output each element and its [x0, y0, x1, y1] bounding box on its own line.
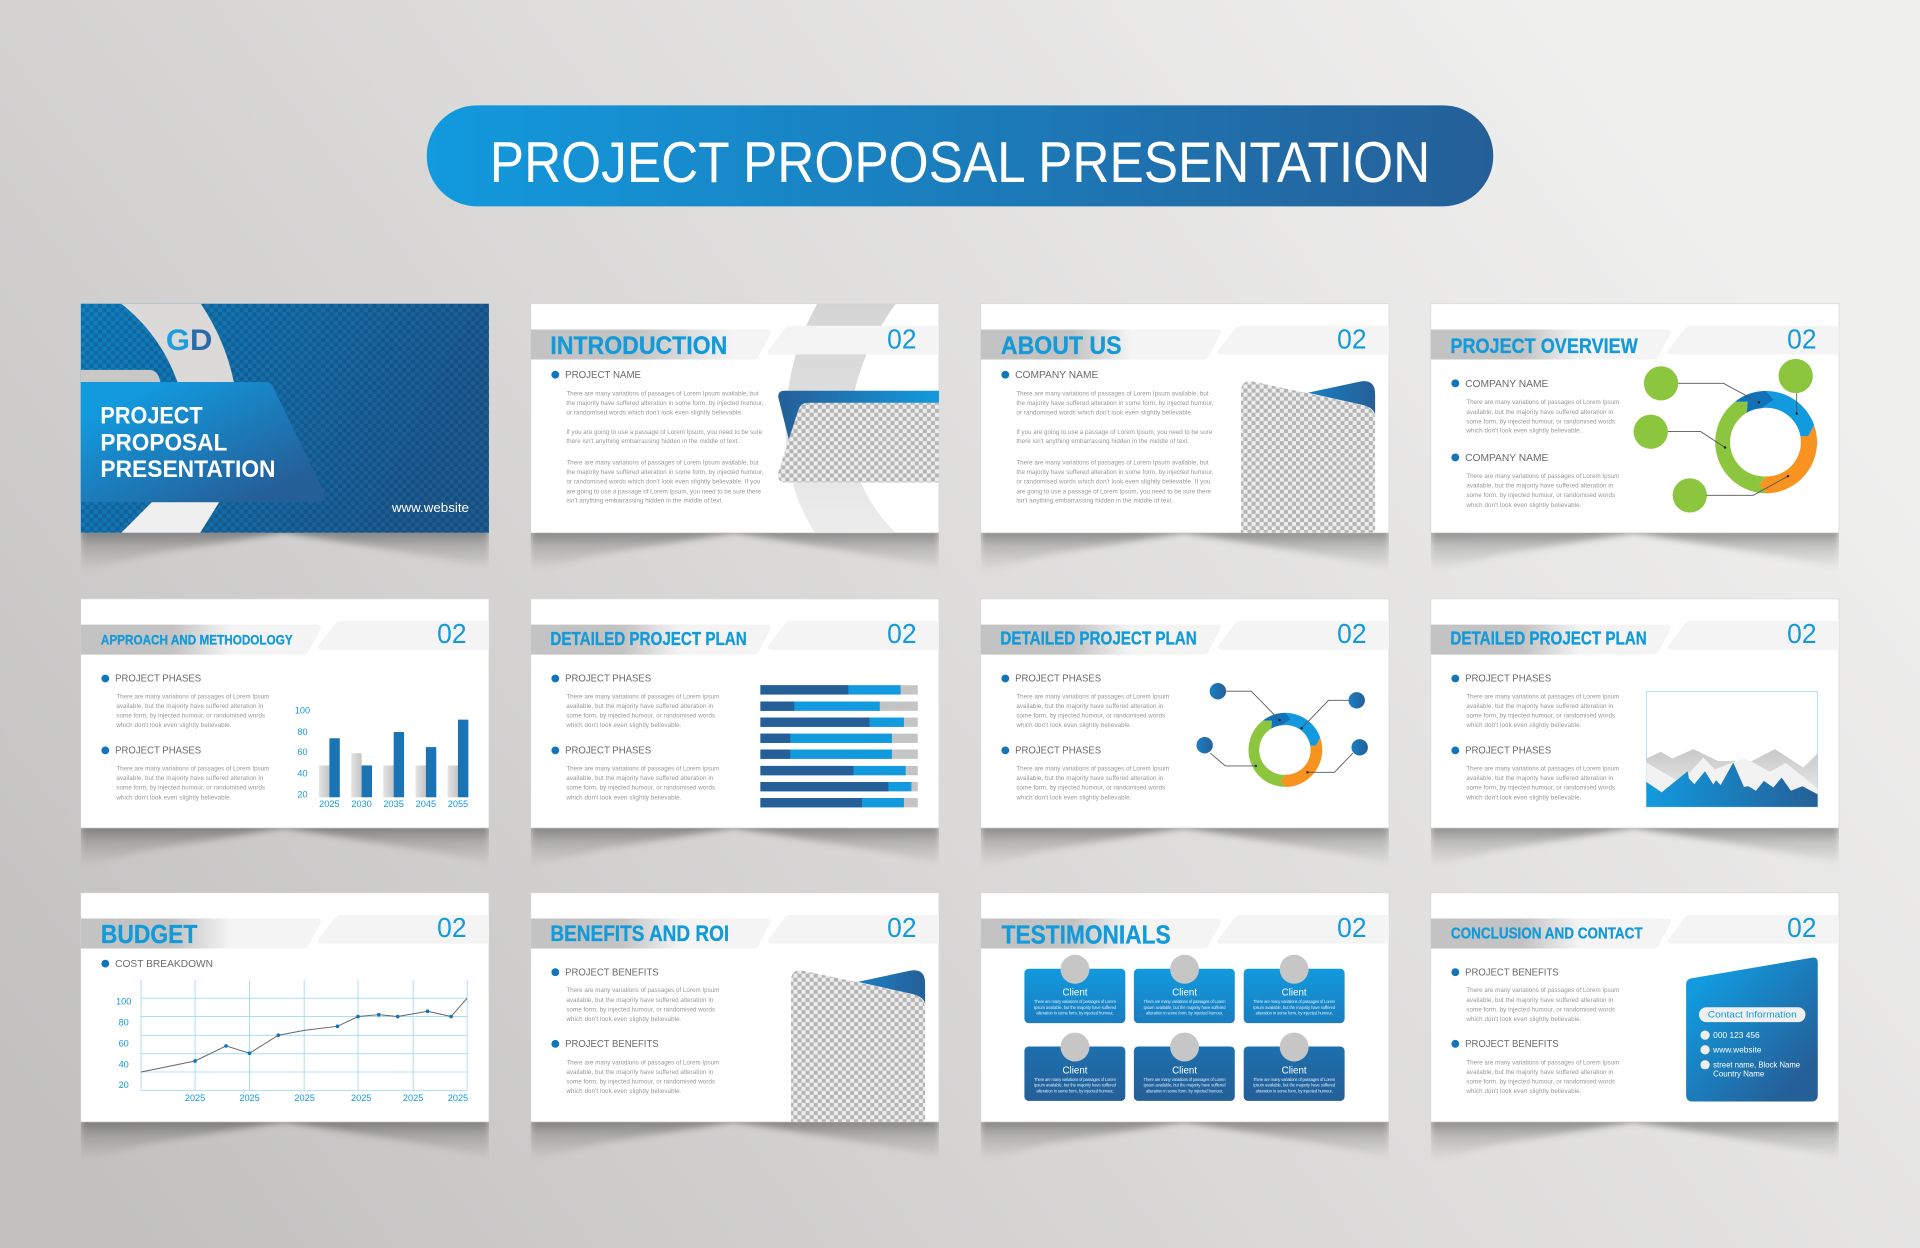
client card 3	[1244, 955, 1345, 1023]
text block: PROJECT PHASES	[115, 674, 201, 685]
text block: some form, by injected humour, or randomised words	[1466, 784, 1615, 791]
text block: There are many variations of passages of Lorem Ipsum available, but	[566, 459, 759, 466]
text block: PROJECT PHASES	[1465, 746, 1551, 757]
slide: testimonials	[981, 893, 1389, 1161]
text block	[101, 674, 269, 801]
text block: If you are going to use a passage of Lorem Ipsum, you need to be sure	[566, 429, 763, 436]
text block: which don't look even slightly believable.	[1465, 428, 1582, 435]
bar chart: 2045	[416, 799, 436, 809]
image placeholder	[791, 970, 925, 1122]
text block: There are many variations of passages of Lorem Ipsum	[1466, 987, 1619, 994]
section label: COST BREAKDOWN	[115, 959, 213, 970]
text block: the majority have suffered alteration in some form, by injected humour,	[1016, 469, 1214, 476]
client card 6: Client	[1282, 1065, 1307, 1076]
text block: or randomised words which don't look even slightly believable.	[1016, 410, 1193, 417]
text block: some form, by injected humour, or randomised words	[1466, 419, 1615, 426]
text block: which don't look even slightly believable.	[1015, 722, 1132, 729]
line chart: 100	[116, 997, 131, 1007]
text block: some form, by injected humour, or randomised words	[566, 784, 715, 791]
line chart: 40	[119, 1059, 129, 1069]
line chart: 2025	[448, 1093, 468, 1103]
client card 3: alteration in some form, by injected humour,	[1256, 1011, 1333, 1016]
slide: approach and methodology: 02	[437, 618, 467, 649]
title pill	[427, 105, 1493, 206]
bar chart: 60	[297, 747, 308, 757]
text block	[551, 674, 719, 801]
text block: some form, by injected humour, or randomised words	[1466, 492, 1615, 499]
cover title: PRESENTATION	[100, 456, 276, 483]
slide: budget	[81, 893, 489, 1161]
client card 5: Ipsum available, but the majority have suffered	[1144, 1083, 1226, 1088]
text block: There are many variations of passages of Lorem Ipsum	[1466, 399, 1619, 406]
text block: There are many variations of passages of Lorem Ipsum	[566, 1059, 719, 1066]
donut chart	[1634, 359, 1817, 513]
text block: available, but the majority have suffered alteration in	[1466, 775, 1614, 782]
contact card: street name, Block Name	[1713, 1059, 1800, 1069]
client card 4: There are many variations of passages of Lorem	[1034, 1077, 1117, 1082]
heading: BENEFITS AND ROI	[550, 921, 729, 946]
text block: PROJECT BENEFITS	[565, 967, 659, 978]
slide: conclusion and contact	[1431, 893, 1839, 1161]
website: www.website	[391, 500, 469, 515]
text block: There are many variations of passages of Lorem Ipsum	[116, 693, 269, 700]
client card 4	[1024, 1033, 1125, 1101]
line chart: 2025	[185, 1093, 205, 1103]
text block: the majority have suffered alteration in some form, by injected humour,	[566, 469, 764, 476]
text block: COMPANY NAME	[1465, 379, 1549, 390]
text block: There are many variations of passages of Lorem Ipsum	[566, 765, 719, 772]
text block	[1451, 379, 1619, 509]
line chart: 60	[119, 1038, 129, 1048]
line chart: 2025	[351, 1093, 371, 1103]
image placeholder	[778, 391, 939, 483]
text block: are going to use a passage of Lorem Ipsum, you need to be sure there	[566, 488, 762, 495]
client card 4: Ipsum available, but the majority have suffered	[1034, 1083, 1117, 1088]
client card 2: alteration in some form, by injected humour,	[1146, 1011, 1223, 1016]
text block: which don't look even slightly believable.	[565, 794, 682, 801]
text block: the majority have suffered alteration in some form, by injected humour,	[1016, 400, 1214, 407]
text block	[1001, 674, 1169, 801]
text block: PROJECT NAME	[565, 370, 641, 381]
client card 3: Ipsum available, but the majority have suffered	[1253, 1005, 1336, 1010]
text block: some form, by injected humour, or randomised words	[1016, 784, 1165, 791]
bar chart	[295, 705, 468, 809]
slide: benefits and roi: 02	[887, 912, 917, 943]
text block: available, but the majority have suffered alteration in	[1016, 775, 1164, 782]
logo GD: GD	[166, 324, 212, 357]
text block: some form, by injected humour, or randomised words	[116, 784, 265, 791]
text block	[551, 967, 719, 1095]
text block: There are many variations of passages of Lorem Ipsum available, but	[1016, 459, 1209, 466]
bar chart: 2030	[351, 799, 372, 809]
stacked bar chart	[760, 685, 918, 807]
text block: some form, by injected humour, or randomised words	[1466, 712, 1615, 719]
heading: DETAILED PROJECT PLAN	[1000, 628, 1197, 649]
text block: there isn't anything embarrassing hidden in the middle of text.	[566, 438, 739, 445]
text block: PROJECT PHASES	[1015, 746, 1101, 757]
text block: available, but the majority have suffered alteration in	[566, 1069, 714, 1076]
heading: TESTIMONIALS	[1002, 921, 1171, 949]
slide: testimonials: 02	[1337, 912, 1367, 943]
text block: If you are going to use a passage of Lorem Ipsum, you need to be sure	[1016, 429, 1213, 436]
text block: PROJECT PHASES	[115, 746, 201, 757]
text block: which don't look even slightly believable.	[1465, 722, 1582, 729]
cover title: PROJECT	[100, 403, 203, 430]
text block: are going to use a passage of Lorem Ipsum, you need to be sure there	[1016, 488, 1212, 495]
client card 1	[1024, 955, 1125, 1023]
text block: There are many variations of passages of Lorem Ipsum	[1466, 473, 1619, 480]
client card 5: alteration in some form, by injected humour,	[1146, 1088, 1223, 1093]
text block: PROJECT PHASES	[565, 746, 651, 757]
text block: available, but the majority have suffered alteration in	[1466, 483, 1614, 490]
client card 6: Ipsum available, but the majority have suffered	[1253, 1083, 1336, 1088]
text block: available, but the majority have suffered alteration in	[1466, 997, 1614, 1004]
slide: detailed project plan, mountains: 02	[1787, 618, 1817, 649]
text block: There are many variations of passages of Lorem Ipsum	[566, 987, 719, 994]
text block: PROJECT PHASES	[1015, 674, 1101, 685]
title pill: PROJECT PROPOSAL PRESENTATION	[490, 131, 1430, 195]
slide: cover	[81, 304, 489, 572]
text block: which don't look even slightly believable.	[1465, 502, 1582, 509]
text block: COMPANY NAME	[1015, 370, 1099, 381]
text block: There are many variations of passages of Lorem Ipsum	[1016, 765, 1169, 772]
text block: isn't anything embarrassing hidden in the middle of text.	[566, 498, 723, 505]
bar chart: 40	[297, 768, 308, 778]
text block: some form, by injected humour, or randomised words	[1466, 1006, 1615, 1013]
client card 3: Client	[1282, 988, 1307, 999]
text block: There are many variations of passages of Lorem Ipsum	[1466, 1059, 1619, 1066]
text block: which don't look even slightly believable.	[1465, 1088, 1582, 1095]
text block: There are many variations of passages of Lorem Ipsum	[1016, 693, 1169, 700]
mountain image	[1646, 692, 1818, 807]
text block: which don't look even slightly believable.	[565, 1016, 682, 1023]
text block: some form, by injected humour, or randomised words	[1016, 712, 1165, 719]
client card 6	[1244, 1033, 1345, 1101]
text block: There are many variations of passages of Lorem Ipsum available, but	[1016, 390, 1209, 397]
contact card: Country Name	[1713, 1069, 1764, 1079]
text block: available, but the majority have suffered alteration in	[1016, 703, 1164, 710]
text block: some form, by injected humour, or randomised words	[566, 712, 715, 719]
text block: which don't look even slightly believable.	[565, 722, 682, 729]
text block: which don't look even slightly believable.	[565, 1088, 682, 1095]
text block: which don't look even slightly believable.	[1465, 794, 1582, 801]
client card 2: There are many variations of passages of Lorem	[1144, 999, 1226, 1004]
text block: some form, by injected humour, or randomised words	[116, 712, 265, 719]
text block: which don't look even slightly believable.	[115, 722, 232, 729]
bar chart: 20	[297, 789, 308, 799]
text block: available, but the majority have suffered alteration in	[1466, 409, 1614, 416]
text block: which don't look even slightly believable.	[115, 794, 232, 801]
text block: PROJECT PHASES	[1465, 674, 1551, 685]
heading: PROJECT OVERVIEW	[1450, 335, 1638, 358]
bar chart: 80	[297, 727, 308, 737]
text block: PROJECT BENEFITS	[565, 1039, 659, 1050]
text block: which don't look even slightly believable.	[1015, 794, 1132, 801]
bar chart: 2055	[448, 799, 468, 809]
heading: DETAILED PROJECT PLAN	[550, 628, 747, 649]
heading: INTRODUCTION	[550, 332, 727, 360]
slide: conclusion and contact: 02	[1787, 912, 1817, 943]
heading: ABOUT US	[1001, 332, 1122, 360]
cover banner	[81, 382, 325, 502]
text block: or randomised words which don't look even slightly believable. If you	[566, 479, 761, 486]
text block: some form, by injected humour, or randomised words	[566, 1006, 715, 1013]
text block: PROJECT BENEFITS	[1465, 967, 1559, 978]
bar chart: 100	[295, 705, 310, 715]
contact card: Contact Information	[1708, 1010, 1797, 1020]
heading: CONCLUSION AND CONTACT	[1451, 926, 1643, 943]
text block: available, but the majority have suffered alteration in	[566, 775, 714, 782]
client card 1: alteration in some form, by injected humour,	[1036, 1011, 1114, 1016]
text block: PROJECT BENEFITS	[1465, 1039, 1559, 1050]
text block: isn't anything embarrassing hidden in the middle of text.	[1016, 498, 1173, 505]
text block: available, but the majority have suffered alteration in	[566, 997, 714, 1004]
donut chart	[1196, 683, 1368, 787]
client card 2	[1134, 955, 1235, 1023]
slide: approach and methodology	[81, 599, 489, 867]
bar chart: 2035	[383, 799, 404, 809]
text block: there isn't anything embarrassing hidden in the middle of text.	[1016, 438, 1189, 445]
text block: or randomised words which don't look even slightly believable.	[566, 410, 743, 417]
line chart: 2025	[239, 1093, 260, 1103]
slide: detailed project plan, donut	[981, 599, 1389, 867]
text block: some form, by injected humour, or randomised words	[566, 1078, 715, 1085]
line chart: 2025	[294, 1093, 315, 1103]
text block: the majority have suffered alteration in some form, by injected humour,	[566, 400, 764, 407]
text block: or randomised words which don't look even slightly believable. If you	[1016, 479, 1211, 486]
text block: available, but the majority have suffered alteration in	[566, 703, 714, 710]
text block: available, but the majority have suffered alteration in	[1466, 703, 1614, 710]
text block: available, but the majority have suffered alteration in	[116, 775, 264, 782]
client card 2: Ipsum available, but the majority have suffered	[1144, 1005, 1226, 1010]
text block	[1451, 674, 1619, 801]
heading: BUDGET	[101, 921, 198, 949]
client card 1: Client	[1062, 988, 1088, 999]
heading: DETAILED PROJECT PLAN	[1450, 628, 1647, 649]
text block: There are many variations of passages of Lorem Ipsum	[116, 765, 269, 772]
client card 4: alteration in some form, by injected humour,	[1036, 1088, 1114, 1093]
image placeholder	[1241, 381, 1375, 533]
client card 6: There are many variations of passages of Lorem	[1253, 1077, 1336, 1082]
slide: introduction: 02	[887, 323, 917, 354]
client card 6: alteration in some form, by injected humour,	[1256, 1088, 1333, 1093]
client card 5: There are many variations of passages of Lorem	[1144, 1077, 1226, 1082]
text block	[551, 370, 764, 505]
text block: There are many variations of passages of Lorem Ipsum	[1466, 765, 1619, 772]
client card 1: Ipsum available, but the majority have suffered	[1034, 1005, 1117, 1010]
slide: project overview	[1431, 304, 1839, 572]
line chart	[116, 980, 468, 1103]
text block: There are many variations of passages of Lorem Ipsum	[566, 693, 719, 700]
contact card	[1686, 958, 1818, 1102]
contact card: 000 123 456	[1713, 1030, 1760, 1040]
cover title: PROPOSAL	[100, 430, 227, 457]
slide: detailed project plan, stacked bars	[531, 599, 939, 867]
slide: project overview: 02	[1787, 323, 1817, 354]
text block: There are many variations of passages of Lorem Ipsum available, but	[566, 390, 759, 397]
text block: COMPANY NAME	[1465, 453, 1549, 464]
slide: introduction	[531, 304, 939, 572]
text block: available, but the majority have suffered alteration in	[116, 703, 264, 710]
client card 3: There are many variations of passages of Lorem	[1253, 999, 1336, 1004]
bar chart: 2025	[319, 799, 340, 809]
text block: PROJECT PHASES	[565, 674, 651, 685]
heading: APPROACH AND METHODOLOGY	[101, 632, 293, 647]
text block: There are many variations of passages of Lorem Ipsum	[1466, 693, 1619, 700]
line chart: 2025	[403, 1093, 423, 1103]
client card 2: Client	[1172, 988, 1197, 999]
slide: detailed project plan, stacked bars: 02	[887, 618, 917, 649]
slide: about us: 02	[1337, 323, 1367, 354]
text block: which don't look even slightly believable.	[1465, 1016, 1582, 1023]
text block	[1001, 370, 1214, 505]
slide: detailed project plan, donut: 02	[1337, 618, 1367, 649]
cover title	[100, 403, 276, 483]
line chart: 20	[119, 1080, 129, 1090]
slide: budget: 02	[437, 912, 467, 943]
client card 4: Client	[1062, 1065, 1088, 1076]
contact card: www.website	[1712, 1045, 1762, 1055]
slide: detailed project plan, mountains	[1431, 599, 1839, 867]
line chart: 80	[119, 1018, 129, 1028]
slide: about us	[981, 304, 1389, 572]
slide: benefits and roi	[531, 893, 939, 1161]
client card 5: Client	[1172, 1065, 1197, 1076]
client card 1: There are many variations of passages of Lorem	[1034, 999, 1117, 1004]
text block: some form, by injected humour, or randomised words	[1466, 1078, 1615, 1085]
text block	[1451, 967, 1619, 1095]
text block: available, but the majority have suffered alteration in	[1466, 1069, 1614, 1076]
client card 5	[1134, 1033, 1235, 1101]
